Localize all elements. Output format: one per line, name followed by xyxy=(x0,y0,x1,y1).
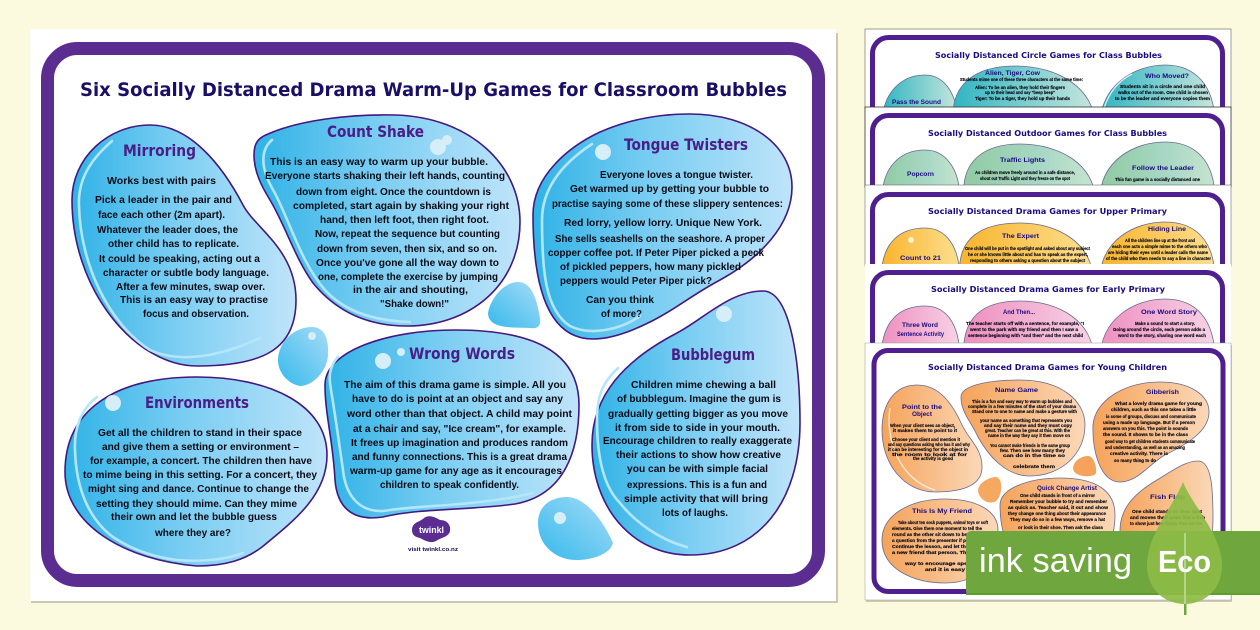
sub-panel: Gibberish: answers on you this. The point is sounds xyxy=(1103,426,1188,431)
logo: twinkl xyxy=(408,516,459,553)
sub-panel: Quick Change Artist: as quick as. Teacher said, it out and show xyxy=(1008,505,1108,510)
sub-panel: This Is My Friend: Continue the lesson, and let them get xyxy=(892,544,983,549)
panel: upper primary sheet: Socially Distanced Drama Games for Upper Primary xyxy=(928,207,1168,216)
panel: Wrong Words xyxy=(325,330,579,518)
panel: Wrong Words: and funny connections. This is a great drama xyxy=(352,451,567,463)
sub-panel: Name Game: few. Then see how many they xyxy=(1000,448,1065,453)
sub-panel: Quick Change Artist: or look in their shoe. Then ask the class xyxy=(1018,525,1103,530)
panel: Count Shake: in the air and shouting, xyxy=(353,284,468,296)
sub-panel: This Is My Friend: a new friend that person. This is a xyxy=(892,550,983,555)
panel: Environments: to mime being in this setting. For a concert, they xyxy=(83,469,317,481)
sub-panel: Name Game: You cannot make friends in the same group xyxy=(990,443,1070,448)
icon: water drop left xyxy=(278,327,328,386)
sub-panel: Fish Flop: and moves their arms like a fish xyxy=(1130,515,1205,520)
panel: Mirroring: character or subtle body language. xyxy=(103,267,269,279)
panel: Bubblegum: you can be with simple facial xyxy=(627,463,768,475)
panel: Environments: Environments xyxy=(145,393,249,412)
sub-panel: Gibberish: the sound. It shows to be in the class xyxy=(1103,432,1188,437)
panel: Mirroring: Works best with pairs xyxy=(107,175,216,187)
panel: Tongue Twisters: of pickled peppers, how many pickled xyxy=(560,261,741,273)
panel: early primary sheet: Going around the circle, each person adds a xyxy=(1113,327,1205,332)
sub-panel: Name Game: This is a fun and easy way to warm up bubbles and xyxy=(972,399,1072,404)
sub-panel: Name Game: name in the way they say it then move on xyxy=(988,433,1070,438)
panel: Bubblegum: lots of laughs. xyxy=(662,507,728,519)
sub-panel: Name Game: celebrate them xyxy=(1013,464,1055,469)
sub-panel: Gibberish: Gibberish xyxy=(1146,390,1179,396)
sub-panel: Point to the Object: and say questions asking who has it and why xyxy=(888,442,970,447)
panel: Bubblegum xyxy=(592,291,800,555)
panel: Wrong Words: The aim of this drama game is simple. All you xyxy=(344,379,566,391)
sub-panel: Gibberish: is some of groups, discuss and communicate xyxy=(1106,414,1196,419)
panel: Mirroring: face each other (2m apart). xyxy=(98,209,225,221)
banner: ink saving: ink saving xyxy=(979,542,1132,580)
sub-panel: Point to the Object: Object xyxy=(912,412,932,418)
panel: Count Shake xyxy=(254,115,520,326)
panel: young children sheet xyxy=(865,343,1232,602)
panel: Bubblegum: of bubblegum. Imagine the gum is xyxy=(617,393,781,405)
panel: Bubblegum: their actions to show how creative xyxy=(616,449,781,461)
sub-panel: This Is My Friend: way to encourage speaking xyxy=(904,561,983,566)
sub-panel: Gibberish xyxy=(1093,382,1209,482)
icon: water drop top xyxy=(488,282,540,328)
panel: upper primary sheet: Count to 21 xyxy=(900,256,942,262)
panel: Wrong Words: It frees up imagination and produces random xyxy=(351,437,568,449)
panel: Wrong Words: children to speak confidently. xyxy=(380,479,519,491)
sub-panel: Point to the Object: Choose your client and mention it xyxy=(892,437,960,442)
logo: twinkl: visit twinkl.co.nz xyxy=(408,547,459,553)
sub-panel: Quick Change Artist: Remember your bubble to try and remember xyxy=(1010,499,1107,504)
sub-panel: Name Game: Name Game xyxy=(995,388,1039,394)
panel: early primary sheet: Make a sound to start a story. xyxy=(1135,321,1195,326)
sub-panel: Fish Flop: Fish Flop xyxy=(1150,495,1185,501)
panel: circle games sheet: Socially Distanced Circle Games for Class Bubbles xyxy=(935,51,1162,60)
icon: eco leaf xyxy=(1147,482,1222,615)
sub-panel: Quick Change Artist: Quick Change Artist xyxy=(1037,486,1097,492)
panel: Count Shake: This is an easy way to warm up your bubble. xyxy=(270,156,488,168)
panel: Count Shake: Once you've gone all the way down to xyxy=(316,257,499,269)
panel: upper primary sheet: responding to others asking a question about the subject xyxy=(970,258,1085,263)
panel: outdoor games sheet: As children move freely around in a safe distance, xyxy=(975,170,1075,175)
sub-panel: Name Game: great. Teacher can be great at this. With the xyxy=(985,428,1070,433)
sub-panel: Gibberish: and understanding, as well as an amazing xyxy=(1105,445,1185,450)
panel: Count Shake: Everyone starts shaking their left hands, counting xyxy=(265,170,505,182)
panel: Wrong Words: word other than that object. A child may point xyxy=(346,408,572,420)
panel: early primary sheet: One Word Story xyxy=(1141,310,1198,316)
panel: upper primary sheet: of the child who then needs to say a line in character xyxy=(1106,256,1211,261)
panel: circle games sheet: Alien: To be an alien, they hold their fingers xyxy=(975,85,1065,90)
panel: Environments: setting they should mime. Can they mime xyxy=(96,498,297,510)
panel: Tongue Twisters: Red lorry, yellow lorry. Unique New York. xyxy=(564,217,762,229)
sub-panel: Point to the Object: it makes them to point to it xyxy=(893,428,958,433)
panel: Bubblegum: simple activity that will bring xyxy=(624,493,768,505)
panel: Mirroring: focus and observation. xyxy=(143,308,249,320)
panel: outdoor games sheet: Popcorn xyxy=(907,172,934,178)
panel: Count Shake: hand, then left foot, then right foot. xyxy=(320,214,489,226)
panel: upper primary sheet: The Expert xyxy=(1002,234,1039,240)
panel: Mirroring: other child has to replicate. xyxy=(108,238,239,250)
panel: Tongue Twisters: Get warmed up by getting your bubble to xyxy=(570,183,769,195)
sub-panel: Gibberish: good way to get children students communicate xyxy=(1105,439,1195,444)
sub-panel: This Is My Friend: round as the other sit down to be asked xyxy=(892,532,982,537)
panel: Tongue Twisters: peppers would Peter Piper pick? xyxy=(560,275,712,287)
panel: Wrong Words: at a chair and say, "Ice cream", for example. xyxy=(353,423,566,435)
panel: Mirroring xyxy=(72,125,296,366)
panel: Tongue Twisters: She sells seashells on the seashore. A proper xyxy=(555,233,765,245)
sub-panel: This Is My Friend: Take about ten sock puppets, animal toys or soft xyxy=(898,520,988,525)
sub-panel: Gibberish: What a lovely drama game for young xyxy=(1115,401,1202,406)
panel: Bubblegum: it from side to side in your mouth. xyxy=(615,422,780,434)
sub-panel: Name Game: Stand one to one to name and make a gesture with xyxy=(972,409,1077,414)
sub-panel: Quick Change Artist: They may do so in a few ways, remove a hat xyxy=(1010,517,1105,522)
sub-panel: Quick Change Artist: they change one thing about their appearance xyxy=(1008,511,1106,516)
panel: upper primary sheet: All the children line up at the front and xyxy=(1125,238,1195,243)
sub-panel: Name Game: and say their name and they must copy xyxy=(984,423,1072,428)
panel: circle games sheet: Who Moved? xyxy=(1145,74,1189,80)
sub-panel: Point to the Object: Point to the xyxy=(902,405,943,411)
panel: Tongue Twisters: copper coffee pot. If Peter Piper picked a peck xyxy=(548,247,764,259)
sub-panel: Fish Flop xyxy=(1120,461,1213,590)
panel: Tongue Twisters: Tongue Twisters xyxy=(624,135,748,154)
sub-panel: This Is My Friend: and it is easy xyxy=(925,567,966,572)
panel: early primary sheet: Sentence Activity xyxy=(897,332,945,338)
panel: early primary sheet: went to the park with my friend and then I saw a xyxy=(969,327,1078,332)
panel: circle games sheet: to be the leader and everyone copies them xyxy=(1115,96,1210,101)
sub-panel: Name Game: can do in the time so xyxy=(1003,453,1065,458)
panel: Count Shake: Now, repeat the sequence but counting xyxy=(315,228,500,240)
sub-panel: This Is My Friend: elements. Give them one moment to tell the xyxy=(892,526,982,531)
sub-panel: This Is My Friend: a question from the presenter if possible xyxy=(892,538,982,543)
panel: Bubblegum: gradually getting bigger as you move xyxy=(608,408,788,420)
panel: circle games sheet xyxy=(865,29,1231,158)
purple poster frame xyxy=(48,48,818,580)
panel: upper primary sheet: he or she knows little about and has to speak as the expert, xyxy=(968,252,1088,257)
panel: Environments: and give them a setting or environment – xyxy=(102,441,299,453)
panel: Tongue Twisters xyxy=(533,114,792,339)
panel: circle games sheet: Students mime one of these three characters at the same time: xyxy=(960,77,1083,82)
panel: upper primary sheet xyxy=(865,185,1231,314)
panel: outdoor games sheet: Traffic Lights xyxy=(1000,158,1046,164)
panel: circle games sheet: Alien, Tiger, Cow xyxy=(985,71,1040,77)
sub-panel: Name Game: your name as something that represents you xyxy=(980,418,1072,423)
panel: Bubblegum: Children mime chewing a ball xyxy=(631,379,776,391)
sub-panel: Point to the Object: When your client sees an object, xyxy=(890,423,955,428)
panel: Tongue Twisters: Everyone loves a tongue twister. xyxy=(600,169,753,181)
panel: Count Shake: down from seven, then six, and so on. xyxy=(317,243,497,255)
sub-panel: Fish Flop: to show just how floppy they can be xyxy=(1130,521,1202,526)
panel: Mirroring: After a few minutes, swap over. xyxy=(116,281,265,293)
panel: Count Shake: "Shake down!" xyxy=(380,298,449,310)
sub-panel: Point to the Object xyxy=(882,385,982,492)
main poster sheet xyxy=(30,29,838,603)
panel: Environments: where they are? xyxy=(154,527,231,539)
sub-panel: This Is My Friend xyxy=(882,499,998,583)
icon: water drop bottom xyxy=(538,497,613,560)
panel: Environments: for example, a concert. The children then have xyxy=(90,455,312,467)
panel: outdoor games sheet: shout out Traffic Light and they freeze on the spot xyxy=(980,176,1070,181)
panel: upper primary sheet: One child will be put in the spotlight and asked about any subject xyxy=(965,246,1090,251)
sub-panel: Fish Flop: One child stands on their spot xyxy=(1132,509,1202,514)
icon: eco leaf: Eco xyxy=(1158,544,1211,579)
panel: early primary sheet: Socially Distanced Drama Games for Early Primary xyxy=(931,285,1166,294)
banner: ink saving xyxy=(966,531,1260,595)
panel: Count Shake: down from eight. Once the countdown is xyxy=(296,186,491,198)
panel: Mirroring: Whatever the leader does, the xyxy=(97,224,238,236)
panel: Count Shake: Count Shake xyxy=(327,122,424,141)
sub-panel: Name Game: complete in a few minutes of the start of your drama xyxy=(968,404,1076,409)
panel: Environments: Get all the children to stand in their space xyxy=(98,427,302,439)
panel: Bubblegum: Encourage children to really exaggerate xyxy=(603,435,792,447)
title: Six Socially Distanced Drama Warm-Up Games for Classroom Bubbles xyxy=(80,79,787,101)
panel: outdoor games sheet: Follow the Leader xyxy=(1132,166,1195,172)
panel: Bubblegum: expressions. This is a fun and xyxy=(627,479,767,491)
sub-panel: Point to the Object: it can be interesting for the object in xyxy=(888,447,968,452)
panel: Wrong Words: warm-up game for any age as it encourages xyxy=(349,465,562,477)
panel: Environments: their own and let the bubble guess xyxy=(111,511,277,523)
panel: Mirroring: Mirroring xyxy=(123,141,196,160)
panel: Bubblegum: Bubblegum xyxy=(671,345,755,364)
panel: Wrong Words: Wrong Words xyxy=(409,344,515,363)
panel: circle games sheet: Tiger: To be a tiger, they hold up their hands xyxy=(975,96,1070,101)
icon: small orange drop left xyxy=(978,477,1001,503)
sub-panel: Name Game xyxy=(961,380,1085,476)
panel: early primary sheet: Three Word xyxy=(902,323,938,329)
panel: Tongue Twisters: practise saying some of these slippery sentences: xyxy=(552,198,783,210)
panel: young children sheet: Socially Distanced Drama Games for Young Children xyxy=(928,363,1167,372)
sub-panel: Point to the Object: the room to look at for xyxy=(892,452,967,457)
icon: small orange drop right xyxy=(1073,456,1096,476)
panel: circle games sheet: Students sit in a circle and one child xyxy=(1120,84,1205,89)
panel: upper primary sheet: are hiding their eyes until a leader calls the name xyxy=(1108,250,1208,255)
panel: early primary sheet xyxy=(865,264,1231,392)
panel: early primary sheet: sentence beginning with "and then" and the next child xyxy=(968,333,1083,338)
panel: Count Shake: one, complete the exercise by jumping xyxy=(318,271,498,283)
sub-panel: Gibberish: so many thing to do xyxy=(1114,458,1156,463)
panel: Count Shake: completed, start again by shaking your right xyxy=(293,200,509,212)
panel: early primary sheet: The teacher starts off with a sentence, for example, "I xyxy=(966,321,1084,326)
sub-panel: Point to the Object: the activity is good xyxy=(913,456,953,461)
panel: outdoor games sheet xyxy=(865,107,1231,236)
logo: twinkl: twinkl xyxy=(419,525,444,535)
sub-panel: This Is My Friend: This Is My Friend xyxy=(912,509,972,515)
sub-panel: Quick Change Artist xyxy=(1000,478,1115,570)
panel: outdoor games sheet: This fun game is a socially distanced one xyxy=(1115,177,1200,182)
panel: Environments xyxy=(65,377,327,566)
panel: circle games sheet: Pass the Sound xyxy=(892,100,941,106)
panel: upper primary sheet: each one acts a simple mime to the others who xyxy=(1112,244,1207,249)
panel: outdoor games sheet: Socially Distanced Outdoor Games for Class Bubbles xyxy=(928,129,1167,138)
sub-panel: Gibberish: using a made up language. But if a person xyxy=(1103,420,1195,425)
sub-panel: Gibberish: creative activity. There is xyxy=(1110,451,1168,456)
sub-panel: Quick Change Artist: One child stands in front of a mirror xyxy=(1020,493,1095,498)
panel: circle games sheet: up to their head and say "beep beep" xyxy=(985,90,1055,95)
panel: Wrong Words: have to do is point at an object and say any xyxy=(352,393,563,405)
panel: Mirroring: It could be speaking, acting out a xyxy=(99,253,260,265)
panel: Mirroring: Pick a leader in the pair and xyxy=(95,194,232,206)
panel: Tongue Twisters: Can you think xyxy=(586,294,654,306)
sub-panel: Gibberish: children, such as this one takes a little xyxy=(1111,407,1196,412)
panel: early primary sheet: And Then... xyxy=(1003,310,1035,316)
panel: circle games sheet: walks out of the room. One child is chosen xyxy=(1117,90,1208,95)
panel: Tongue Twisters: of more? xyxy=(601,308,642,320)
panel: Mirroring: This is an easy way to practise xyxy=(120,294,268,306)
panel: Environments: might sing and dance. Continue to change the xyxy=(88,483,309,495)
panel: early primary sheet: word to the story, sharing one word each xyxy=(1117,333,1206,338)
panel: upper primary sheet: Hiding Line xyxy=(1148,227,1187,233)
